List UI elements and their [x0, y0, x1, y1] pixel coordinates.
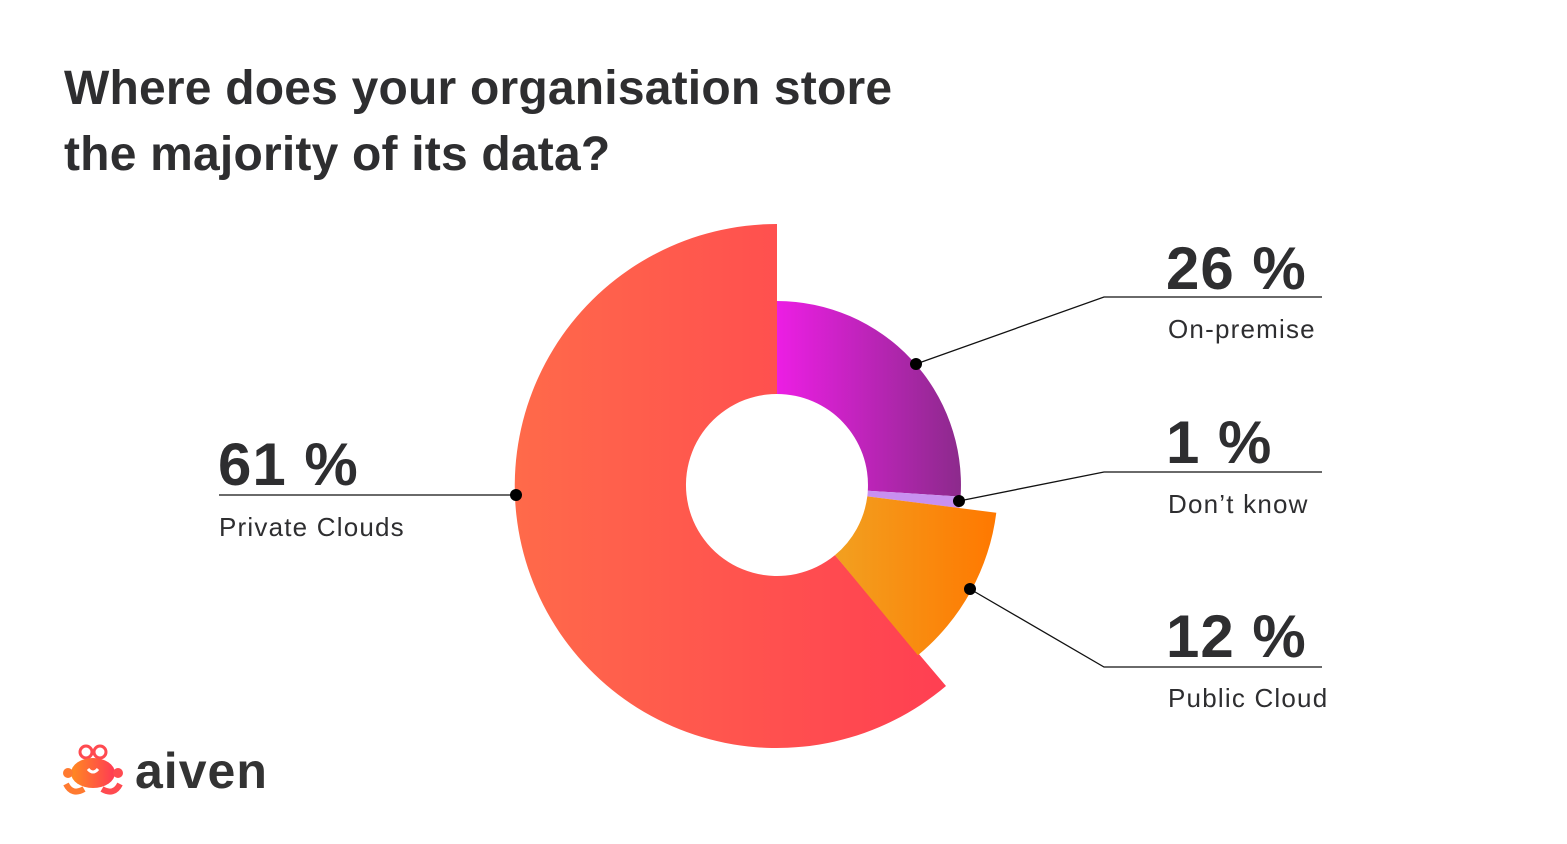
text: 26 %	[1166, 235, 1307, 302]
segment: don't know	[867, 491, 961, 508]
label: 61% private clouds	[218, 431, 405, 542]
label: 12% public cloud	[1166, 603, 1328, 713]
text: On-premise	[1168, 314, 1316, 344]
text: 12 %	[1166, 603, 1307, 670]
label: 1% don't know	[1166, 409, 1309, 519]
segment: private clouds	[515, 224, 946, 748]
text: Public Cloud	[1168, 683, 1328, 713]
text: Private Clouds	[219, 512, 405, 542]
text: 1 %	[1166, 409, 1272, 476]
title: Where does your organisation store	[64, 62, 892, 115]
logo: aiven: aiven	[135, 743, 268, 799]
logo: aiven	[63, 743, 268, 799]
title: the majority of its data?	[64, 128, 610, 181]
title	[64, 62, 892, 181]
label: 26% on-premise	[1166, 235, 1316, 344]
text: Don’t know	[1168, 489, 1309, 519]
text: 61 %	[218, 431, 359, 498]
segment: public cloud	[835, 496, 996, 655]
leader lines	[219, 297, 1322, 667]
segment: on-premise	[777, 301, 961, 497]
